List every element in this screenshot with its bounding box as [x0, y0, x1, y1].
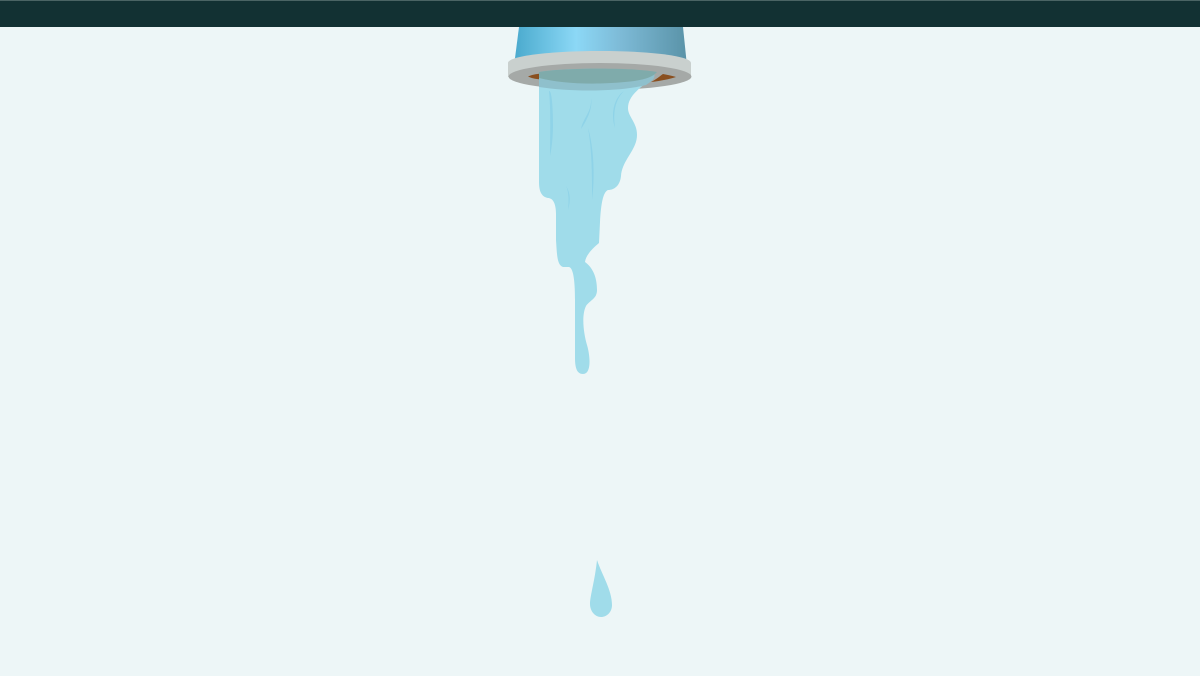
falling water drop — [590, 560, 612, 617]
pipe assembly — [508, 27, 692, 90]
water over flange — [539, 69, 655, 91]
pipe opening rust — [528, 74, 676, 82]
pipe flange — [508, 51, 692, 90]
water inner ellipse — [539, 69, 657, 84]
water body — [539, 80, 650, 374]
ceiling bar — [0, 0, 1200, 27]
water ripples — [549, 91, 624, 210]
pipe body — [514, 27, 687, 66]
water stream — [539, 69, 657, 374]
